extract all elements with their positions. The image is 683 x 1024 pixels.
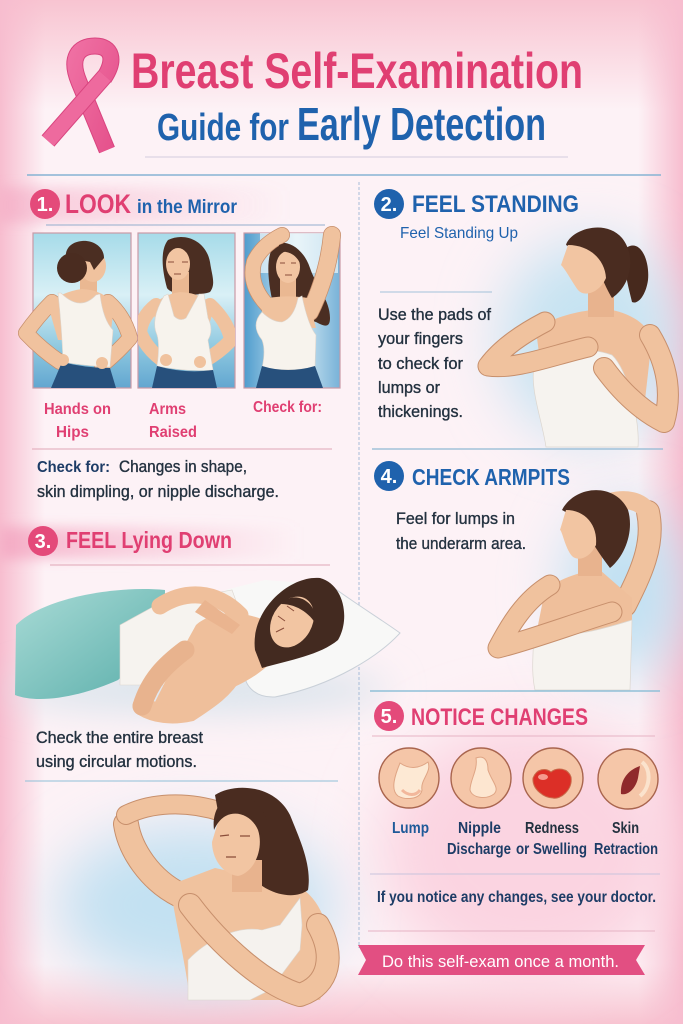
banner: monthly reminder: Do this self-exam once a month. — [382, 952, 619, 971]
icon labels: Nipple — [458, 820, 501, 837]
icon: redness or swelling — [523, 748, 583, 808]
heading: step 4: CHECK ARMPITS — [412, 464, 570, 490]
icon labels: Discharge — [447, 841, 511, 858]
heading: step 3: FEEL Lying Down — [66, 527, 232, 553]
icon: lump — [379, 748, 439, 808]
heading: step 3: 3. — [35, 531, 51, 553]
icon: skin retraction — [598, 749, 658, 809]
panel: step 1 look in the mirror — [26, 189, 340, 501]
text: use finger pads: thickenings. — [378, 403, 463, 421]
title: Early Detection — [297, 98, 546, 150]
panel: step 5 notice changes — [358, 701, 660, 975]
title — [131, 43, 583, 157]
illustration: woman lying down — [15, 578, 400, 716]
icon labels: or Swelling — [516, 841, 587, 858]
text: use finger pads: lumps or — [378, 379, 440, 397]
divider lines — [27, 175, 661, 948]
text: use finger pads — [378, 306, 491, 421]
icon labels: Redness — [525, 820, 579, 837]
heading: step 2: Feel Standing Up — [400, 225, 518, 242]
heading: step 3 — [28, 526, 330, 565]
banner: monthly reminder — [358, 945, 645, 975]
image captions: Arms — [149, 401, 186, 418]
heading: step 4: 4. — [381, 466, 397, 488]
icon: nipple discharge — [451, 748, 511, 808]
panel: step 3 feel lying down — [15, 526, 400, 771]
text: check for changes: skin dimpling, or nipple discharge. — [37, 483, 279, 501]
illustration: front view arms on hips — [138, 233, 235, 388]
text: use finger pads: your fingers — [378, 330, 463, 348]
icon labels: Retraction — [594, 841, 658, 858]
title: Guide for — [157, 107, 289, 149]
heading: step 2: 2. — [381, 194, 397, 216]
heading: step 2 — [374, 189, 579, 292]
text: feel underarm: Feel for lumps in — [396, 510, 515, 528]
icon labels — [392, 820, 658, 858]
text: check for changes — [37, 458, 279, 501]
text: use finger pads: Use the pads of — [378, 306, 491, 324]
icon labels: Skin — [612, 820, 639, 837]
text: circular motions: using circular motions. — [36, 753, 197, 771]
illustration: woman checking armpit — [498, 490, 650, 690]
heading: step 1: LOOK — [65, 189, 131, 219]
heading: step 4 — [374, 461, 570, 491]
heading: step 1 — [30, 189, 325, 225]
text: feel underarm — [396, 510, 526, 553]
illustration: woman standing, checking breast — [488, 227, 668, 447]
icon: pink ribbon — [48, 46, 111, 150]
icon labels: Lump — [392, 820, 429, 837]
illustration: back view hands on hips — [26, 233, 131, 388]
image captions — [44, 399, 322, 441]
illustration: arms raised view — [244, 233, 340, 388]
panel: step 4 check armpits — [374, 461, 650, 690]
image captions: Hips — [56, 424, 89, 441]
heading: step 5: NOTICE CHANGES — [411, 704, 588, 731]
panel: step 2 feel standing — [374, 189, 668, 447]
image captions: Hands on — [44, 401, 111, 418]
text: use finger pads: to check for — [378, 355, 463, 373]
text: circular motions — [36, 729, 203, 771]
illustration: woman checking armpit, lower left — [126, 788, 332, 1000]
heading: step 1: in the Mirror — [137, 197, 238, 218]
text: check for changes: Changes in shape, — [119, 458, 247, 476]
image captions: Check for: — [253, 399, 322, 416]
heading: step 5 — [372, 701, 655, 736]
text: check for changes: Check for: — [37, 459, 110, 476]
heading: step 2: FEEL STANDING — [412, 191, 579, 218]
heading: step 5: 5. — [381, 706, 397, 728]
heading: step 1: 1. — [37, 194, 53, 216]
text: circular motions: Check the entire breast — [36, 729, 203, 747]
text: feel underarm: the underarm area. — [396, 535, 526, 553]
image captions: Raised — [149, 424, 197, 441]
